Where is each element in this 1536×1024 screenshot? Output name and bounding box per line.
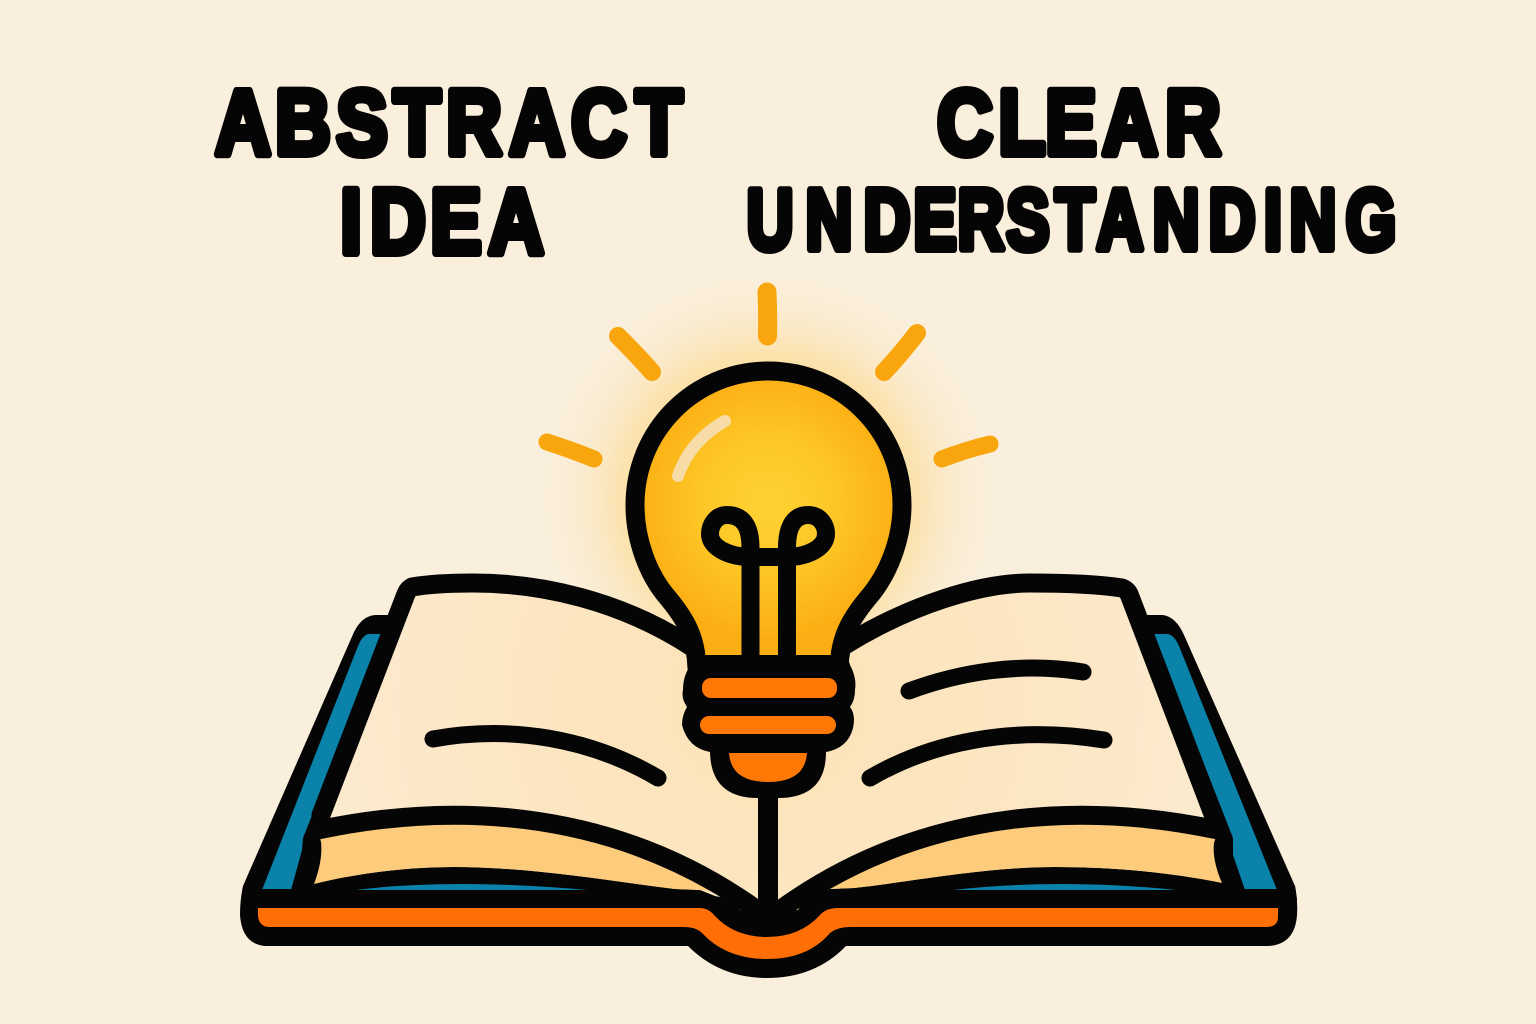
right page text line upper	[909, 668, 1083, 691]
left page stack	[314, 815, 760, 912]
orange band top	[702, 678, 837, 698]
blue sliver right	[953, 884, 1176, 890]
title: abstract idea: IDEA	[340, 171, 544, 272]
orange base strip	[258, 908, 1278, 959]
left stack shadow	[300, 867, 740, 912]
bulb glow	[533, 265, 1003, 735]
stem	[758, 780, 778, 915]
right page text line lower	[870, 735, 1104, 778]
blue cover strip left	[262, 634, 384, 890]
right page stack	[777, 815, 1222, 912]
icon: open book	[240, 583, 1297, 978]
left page outline	[321, 583, 692, 815]
orange tip	[729, 753, 807, 782]
book back cover left	[243, 615, 420, 900]
title: abstract idea	[215, 72, 682, 272]
filament	[710, 515, 826, 662]
right page	[768, 583, 1218, 905]
right page outline	[845, 583, 1216, 822]
icon: light bulb	[635, 371, 902, 915]
title: clear understanding: UNDERSTANDING	[747, 172, 1396, 267]
book base black outline	[240, 886, 1297, 978]
title: abstract idea: ABSTRACT	[215, 72, 682, 173]
left stack curve	[318, 815, 760, 912]
highlight	[678, 421, 725, 476]
title: clear understanding	[747, 72, 1396, 267]
orange band bottom	[700, 716, 836, 734]
bulb glass	[635, 371, 902, 668]
blue cover strip right	[1153, 634, 1277, 890]
title: clear understanding: CLEAR	[937, 72, 1221, 173]
left page text line	[433, 734, 658, 778]
screw base	[682, 655, 855, 798]
book back cover right	[1115, 615, 1297, 900]
right stack curve	[777, 815, 1218, 912]
left page	[320, 583, 768, 905]
right stack shadow	[798, 867, 1236, 912]
blue sliver left	[356, 884, 587, 890]
icon: light rays	[547, 292, 990, 459]
